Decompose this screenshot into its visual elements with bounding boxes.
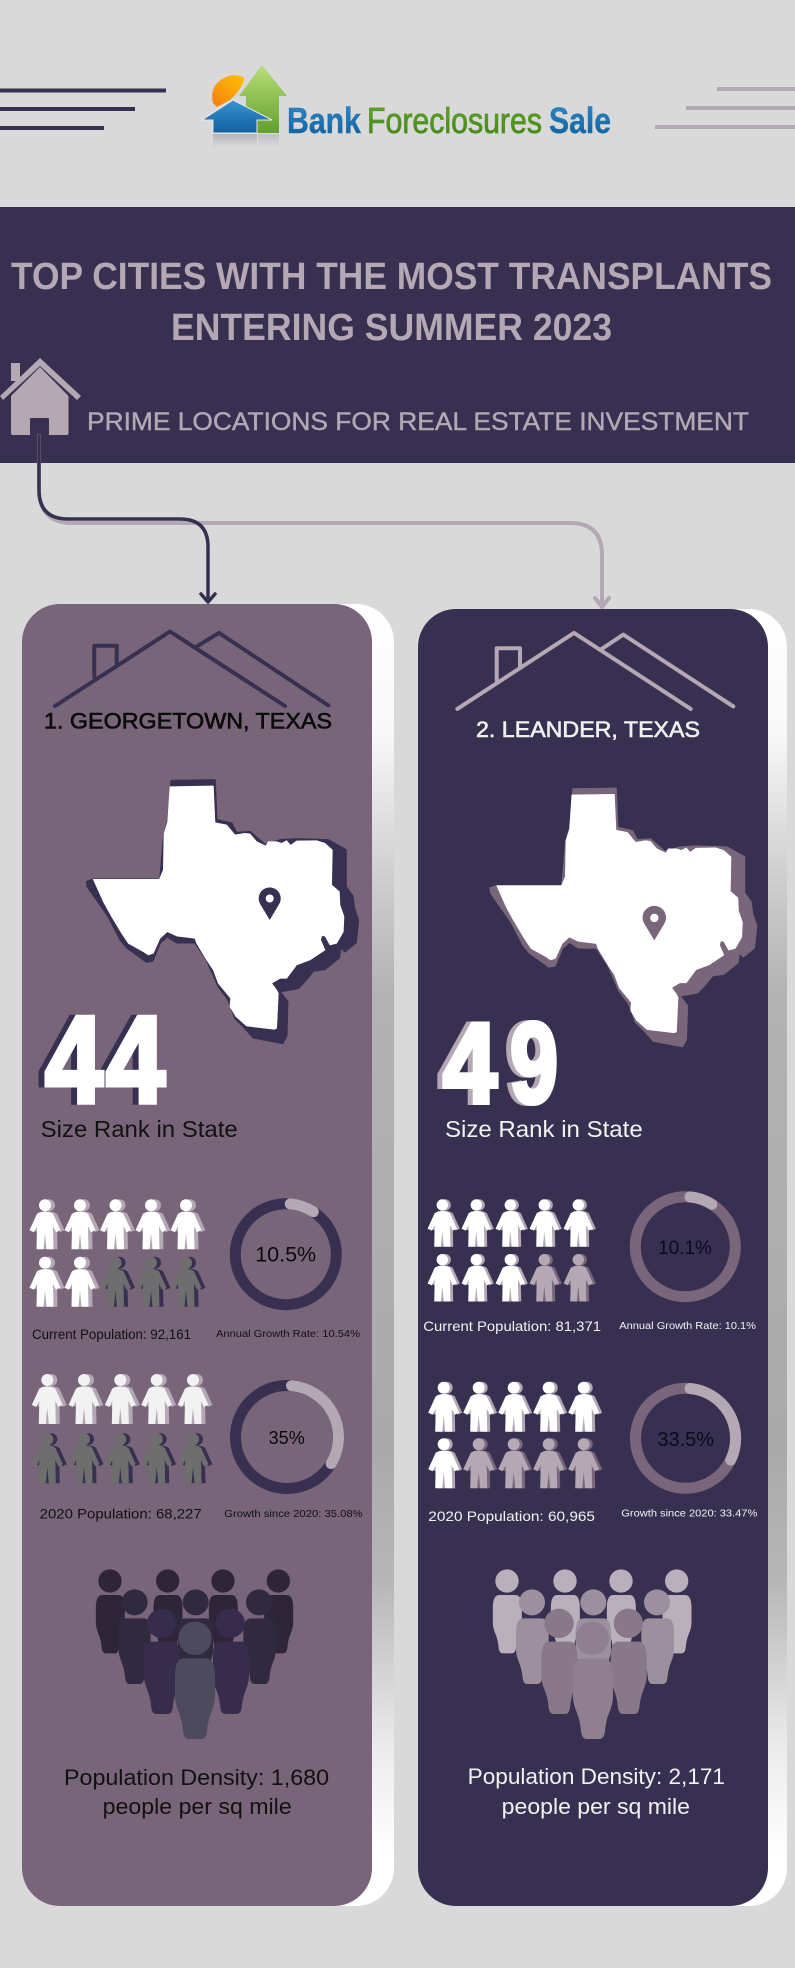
2020 population label: 2020 Population: 68,227 [40,1506,202,1522]
pictogram: 2020 population [428,1382,602,1488]
population density text: Population Density: 2,171 [468,1764,725,1789]
growth since 2020 label: Growth since 2020: 35.08% [224,1508,363,1520]
logo wordmark: Foreclosures [367,100,542,141]
growth since 2020 label: Growth since 2020: 33.47% [621,1508,757,1520]
population density text: Population Density: 1,680 [64,1765,329,1790]
icon: map pin [259,887,281,920]
pictogram: 2020 population [32,1374,212,1483]
donut: annual growth 10.5% [235,1204,336,1305]
donut: growth since 2020 33.5% [636,1388,736,1488]
panel body [22,604,372,1906]
rank number [438,1000,558,1128]
map: Texas [87,780,358,1043]
heading: 1. GEORGETOWN, TEXAS [44,709,332,734]
pictogram: current population [428,1199,596,1302]
rank number: 4 [100,992,159,1130]
2020 population label: 2020 Population: 60,965 [428,1508,595,1524]
heading: 2. LEANDER, TEXAS [476,717,700,742]
population density text: people per sq mile [103,1794,292,1819]
map: Texas [490,788,756,1046]
rank number: 4 [45,992,103,1130]
panel backing [200,604,394,1906]
icon: crowd [493,1569,691,1739]
current population label: Current Population: 81,371 [423,1318,601,1334]
icon: map pin [643,906,666,940]
panel: Georgetown [22,604,394,1906]
arrow: to Georgetown [39,436,215,602]
annual growth label: Annual Growth Rate: 10.54% [216,1328,360,1340]
logo wordmark [287,100,611,141]
annual growth label: Annual Growth Rate: 10.1% [619,1320,756,1332]
donut: annual growth 10.5%: 10.5% [255,1243,316,1267]
population density text [468,1764,725,1819]
icon: house [0,358,81,435]
rank number: 9 [505,1000,553,1128]
subtitle: PRIME LOCATIONS FOR REAL ESTATE INVESTMENT [87,408,749,436]
rank number: 4 [438,1000,492,1128]
panel: Leander [418,609,787,1906]
pictogram: current population [30,1199,206,1307]
rank number: 9 [510,1000,558,1128]
rank number: 4 [106,992,165,1130]
icon: crowd [96,1569,293,1739]
panel backing [600,609,787,1906]
icon: house, sun and arrow [202,65,287,147]
rank number [39,992,165,1130]
rank label: Size Rank in State [445,1116,643,1142]
logo: Bank Foreclosures Sale [202,65,611,147]
donut: growth since 2020 35%: 35% [269,1428,305,1448]
current population label: Current Population: 92,161 [32,1327,191,1342]
title: ENTERING SUMMER 2023 [171,307,612,349]
rank number: 4 [443,1000,497,1128]
logo wordmark: Sale [549,100,611,141]
donut: growth since 2020 33.5%: 33.5% [657,1429,714,1451]
donut: growth since 2020 35% [236,1386,339,1488]
donut: annual growth 10.1% [635,1197,735,1297]
population density text [64,1765,329,1819]
title [11,256,772,349]
logo wordmark: Bank [287,100,362,141]
arrow: to Leander [39,436,609,607]
icon: rooftop [55,632,328,706]
icon: rooftop [457,633,733,709]
population density text: people per sq mile [502,1794,690,1819]
donut: annual growth 10.1%: 10.1% [658,1238,712,1259]
rank number: 4 [39,992,97,1130]
panel body [418,609,768,1906]
decorative speed lines right [655,87,795,129]
rank label: Size Rank in State [41,1116,238,1142]
header banner [0,207,795,463]
decorative speed lines left [0,88,166,130]
